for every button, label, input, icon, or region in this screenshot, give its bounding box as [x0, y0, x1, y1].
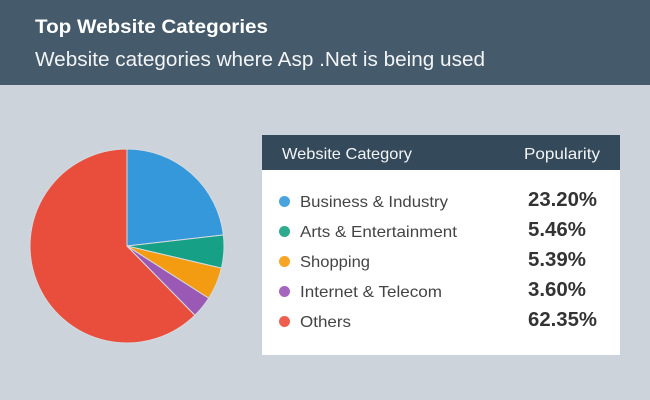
panel: data table — [262, 135, 620, 355]
row: Internet & Telecom — [279, 279, 586, 301]
row: Others: Others — [300, 314, 351, 331]
slice: Business & Industry 23.20% — [127, 149, 223, 246]
row: Business & Industry: Business & Industry — [300, 194, 448, 211]
slice: Others 62.35% — [30, 149, 195, 343]
row: Internet & Telecom: 3.60% — [528, 279, 586, 301]
row: Business & Industry — [279, 189, 597, 211]
row: Shopping: Shopping — [300, 254, 370, 271]
title: Top Website Categories — [35, 17, 268, 38]
row: Shopping: 5.39% — [528, 249, 586, 271]
row: Others: 62.35% — [528, 309, 597, 331]
row: Arts & Entertainment: 5.46% — [528, 219, 586, 241]
pie chart — [30, 149, 224, 343]
row: Arts & Entertainment — [279, 219, 586, 241]
table header — [262, 135, 620, 170]
row: Internet & Telecom: Internet & Telecom — [300, 284, 442, 301]
column heading: popularity: Popularity — [524, 146, 600, 163]
row: Arts & Entertainment: Arts & Entertainment — [300, 224, 458, 241]
slice: Internet & Telecom 3.60% — [127, 246, 209, 315]
row: Shopping — [279, 249, 586, 271]
subtitle: Website categories where Asp .Net is being used — [35, 49, 485, 71]
column heading: category: Website Category — [282, 146, 412, 163]
slice: Arts & Entertainment 5.46% — [127, 235, 224, 268]
row: Others — [279, 309, 597, 331]
header banner — [0, 0, 650, 85]
slice: Shopping 5.39% — [127, 246, 221, 298]
row: Business & Industry: 23.20% — [528, 189, 597, 211]
